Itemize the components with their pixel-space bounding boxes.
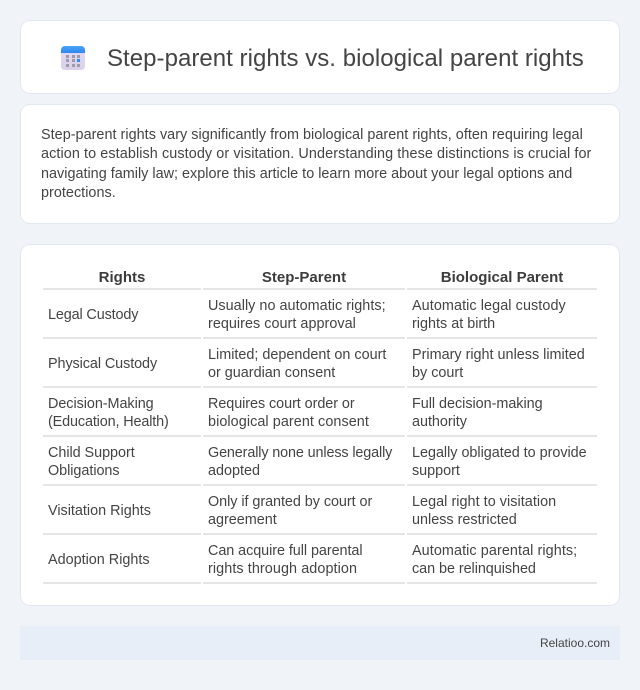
row: Visitation Rights: unless restricted (412, 512, 517, 528)
row: Visitation Rights (48, 494, 556, 528)
row: Child Support Obligations: Generally none unless legally (208, 445, 392, 461)
text block: introduction: action to establish custody or visitation. Understanding these distinctions is crucial for (41, 146, 591, 162)
row: Physical Custody: Physical Custody (48, 356, 157, 372)
text block: introduction: protections. (41, 185, 116, 201)
row: Child Support Obligations: Legally obligated to provide (412, 445, 587, 461)
row: Physical Custody: or guardian consent (208, 365, 335, 381)
row: Physical Custody (48, 347, 585, 381)
panel: comparison table (20, 244, 620, 606)
row: Child Support Obligations: Obligations (48, 463, 120, 479)
footer text: Relatioo.com (540, 636, 610, 650)
row: Adoption Rights: can be relinquished (412, 561, 536, 577)
row: Decision-Making: biological parent consent (208, 414, 369, 430)
row: Visitation Rights: Only if granted by court or (208, 494, 372, 510)
row: Legal Custody: Legal Custody (48, 307, 138, 323)
row: Adoption Rights (48, 543, 577, 577)
text block: introduction (41, 127, 592, 201)
row: Adoption Rights: Can acquire full parental (208, 543, 362, 559)
row: Legal Custody (48, 298, 566, 332)
row: Legal Custody: requires court approval (208, 316, 356, 332)
row: Legal Custody: Usually no automatic rights; (208, 298, 386, 314)
row: Decision-Making: authority (412, 414, 467, 430)
row: Legal Custody: Automatic legal custody (412, 298, 566, 314)
table header: Biological Parent: Biological Parent (441, 269, 563, 286)
text block: introduction: navigating family law; explore this article to learn more about your legal options and (41, 166, 572, 182)
row: Decision-Making: (Education, Health) (48, 414, 169, 430)
icon: calendar (61, 46, 85, 70)
text block: introduction: Step-parent rights vary significantly from biological parent rights, often requiring legal (41, 127, 583, 143)
row: Physical Custody: Limited; dependent on court (208, 347, 386, 363)
table header: Step-Parent: Step-Parent (262, 269, 346, 286)
row: Visitation Rights: agreement (208, 512, 277, 528)
row: Decision-Making: Decision-Making (48, 396, 154, 412)
row: Child Support Obligations: Child Support (48, 445, 135, 461)
row: Decision-Making (48, 396, 543, 430)
row: Visitation Rights: Visitation Rights (48, 503, 151, 519)
row: Legal Custody: rights at birth (412, 316, 495, 332)
title: Step-parent rights vs. biological parent rights (107, 45, 584, 72)
row: Adoption Rights: Automatic parental rights; (412, 543, 577, 559)
row: Child Support Obligations (48, 445, 587, 479)
panel: title card (20, 20, 620, 94)
panel: introduction (20, 104, 620, 224)
row: Physical Custody: by court (412, 365, 463, 381)
row: Decision-Making: Requires court order or (208, 396, 355, 412)
row: Adoption Rights: Adoption Rights (48, 552, 150, 568)
footer bar (20, 626, 620, 660)
row: Decision-Making: Full decision-making (412, 396, 543, 412)
row: Child Support Obligations: support (412, 463, 460, 479)
row: Visitation Rights: Legal right to visitation (412, 494, 556, 510)
row: Physical Custody: Primary right unless limited (412, 347, 585, 363)
row: Adoption Rights: rights through adoption (208, 561, 357, 577)
table header: Rights: Rights (99, 269, 145, 286)
row: Child Support Obligations: adopted (208, 463, 260, 479)
